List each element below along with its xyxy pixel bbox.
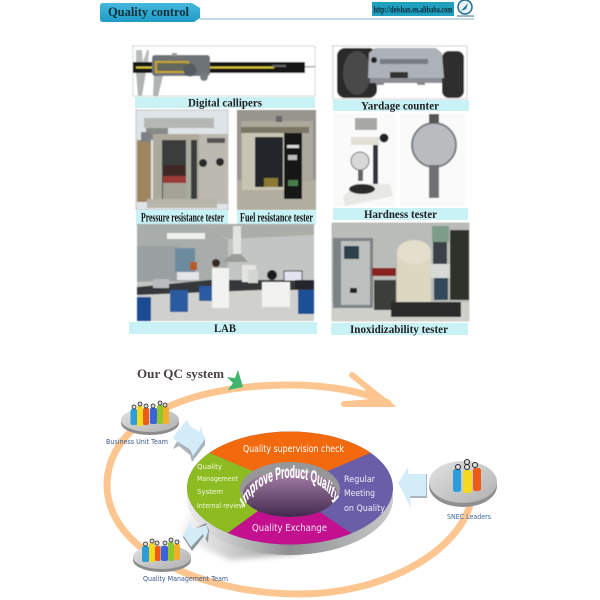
team label: Quality Management Team	[143, 575, 228, 583]
label band: LAB	[129, 322, 317, 335]
segment: orange	[209, 432, 371, 472]
inner hub	[240, 462, 340, 517]
segment text: Quality Management System: System	[197, 488, 223, 496]
arrow: SNEC leaders to wheel	[398, 467, 427, 508]
label band: Fuel resistance tester: Fuel resistance tester	[240, 210, 313, 224]
heading: Our QC system: Our QC system	[137, 366, 224, 381]
label band: Hardness tester: Hardness tester	[364, 209, 437, 221]
double arrow: business unit to wheel	[173, 420, 205, 462]
segment text: Regular Meeting on Quality: on Quality	[344, 504, 385, 514]
segment text: Quality Management System: Quality	[197, 463, 222, 471]
segment text: Regular Meeting on Quality: Regular	[344, 475, 375, 485]
team: SNEC Leaders	[429, 460, 497, 521]
arrow: quality management to wheel	[183, 522, 209, 551]
disc	[429, 461, 497, 507]
segment text: Quality Management System: Internal review	[197, 502, 244, 510]
photo: furnace	[332, 223, 469, 321]
header bar	[100, 0, 474, 22]
disc	[133, 545, 191, 572]
wheel segments	[187, 432, 393, 544]
people icons	[453, 460, 481, 493]
photo: hardness stand	[333, 113, 466, 207]
team label: Business Unit Team	[106, 438, 168, 446]
panel: pressure resistance tester	[136, 110, 228, 225]
panel: inoxidizability tester	[331, 223, 469, 336]
team label: SNEC Leaders	[447, 513, 491, 521]
orange cycle arrow	[107, 375, 470, 594]
segment text: Regular Meeting on Quality: Meeting	[344, 489, 375, 499]
team: Quality Management Team	[133, 538, 228, 583]
label band: Inoxidizability tester: Inoxidizability tester	[350, 324, 448, 336]
segment text: Quality supervision check: Quality supervision check	[243, 444, 344, 455]
segment: green	[187, 452, 258, 533]
segment text: Quality Management System	[197, 463, 244, 510]
photo: pressure machine	[136, 110, 228, 210]
photo: laboratory	[137, 224, 314, 321]
icon: company logo	[457, 0, 474, 17]
label band: Digital callipers	[135, 97, 315, 110]
hub title: Improve Product Quality	[240, 465, 339, 508]
diagram: quality wheel	[187, 432, 393, 555]
heading tab: Quality control	[100, 3, 200, 22]
segment: magenta	[228, 511, 352, 544]
heading tab: Quality control: Quality control	[108, 5, 190, 19]
website url box	[372, 2, 454, 16]
segment text: Regular Meeting on Quality	[344, 475, 385, 514]
panel: yardage counter	[333, 46, 469, 112]
people icons	[142, 538, 180, 562]
people icons	[130, 401, 169, 426]
label band: Digital callipers: Digital callipers	[188, 98, 262, 110]
team: Business Unit Team	[106, 401, 179, 446]
wheel base	[187, 441, 393, 555]
label band: LAB: LAB	[214, 323, 236, 335]
disc	[121, 408, 179, 435]
icon: green arrow	[227, 370, 243, 390]
segment text: Quality Management System: Management	[197, 475, 238, 483]
panel: hardness tester	[333, 113, 468, 221]
panel: LAB	[129, 224, 317, 335]
label band: Yardage counter: Yardage counter	[361, 100, 439, 112]
label band: Pressure resistance tester: Pressure resistance tester	[141, 210, 224, 224]
segment text: Quality Exchange: Quality Exchange	[252, 523, 327, 534]
website url box: http://deishan.en.alibaba.com	[374, 4, 453, 14]
photo: fuel chamber	[237, 110, 316, 210]
photo: callipers	[133, 46, 315, 96]
panel: fuel resistance tester	[237, 110, 316, 225]
photo: yardage counter	[333, 46, 467, 99]
panel: digital callipers	[133, 46, 315, 110]
quality management shadow	[175, 505, 300, 560]
